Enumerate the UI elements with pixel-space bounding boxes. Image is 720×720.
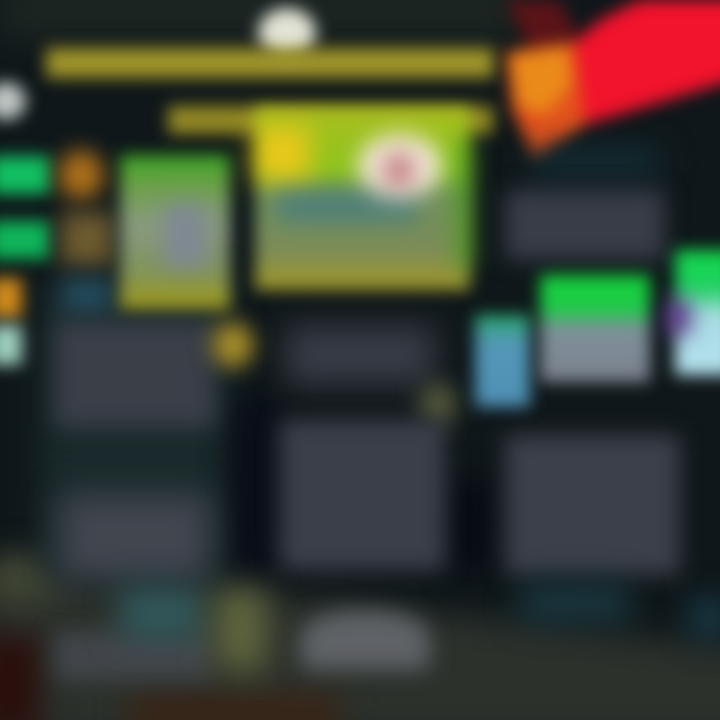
background: centre dark navy column (235, 400, 275, 570)
panel: green-grey card (540, 275, 650, 382)
panel: cyan card (475, 315, 530, 407)
icon: olive dot (418, 382, 458, 426)
title (34, 35, 504, 146)
left pale tab (0, 325, 22, 365)
bottom right teal spot (690, 600, 720, 635)
icon: left white circle (0, 82, 26, 120)
text block: bottom left (55, 632, 210, 680)
text block: left upper (55, 322, 215, 427)
card image strip (277, 190, 417, 222)
panel: right grey heading block (505, 190, 665, 260)
magenta accent (666, 300, 690, 334)
lime right edge (457, 138, 472, 268)
text block: left lower (60, 495, 210, 580)
white-pink circle (358, 134, 442, 198)
background: bottom left dark red patch (0, 635, 40, 720)
panel: small green card (120, 155, 230, 310)
title line 1 (46, 48, 494, 78)
background: bottom left olive glow (0, 555, 60, 600)
yellow corner glow (255, 126, 310, 181)
card picture (165, 203, 207, 269)
bottom right teal strip (520, 585, 630, 620)
background: centre right dark column (450, 480, 490, 570)
text block: centre heading (285, 325, 435, 385)
panel: green-cyan card (675, 250, 720, 375)
left orange tab (0, 278, 22, 318)
icon: bottom left teal spot (120, 588, 205, 638)
circle centre (383, 152, 415, 188)
background: bottom centre brown patch (130, 695, 340, 720)
banner shadow teal (530, 150, 660, 175)
text block: right body (505, 435, 680, 575)
icon: yellow dot (212, 322, 254, 368)
icon: olive bottom spot (215, 588, 267, 670)
orange icon spot (58, 150, 104, 200)
panel: large yellow-green card (255, 108, 470, 290)
brown label spot (60, 212, 114, 266)
left green tab 2 (0, 221, 50, 259)
text block: bottom centre (300, 610, 430, 670)
background: left column teal tint (40, 280, 230, 580)
banner: red ribbon (494, 0, 720, 165)
left green tab 1 (0, 156, 50, 194)
blue label spot (62, 278, 112, 313)
title line 2 (168, 106, 493, 134)
text block: centre body (280, 420, 445, 570)
icon: top circle (258, 8, 316, 58)
background glow: top band (0, 0, 520, 40)
